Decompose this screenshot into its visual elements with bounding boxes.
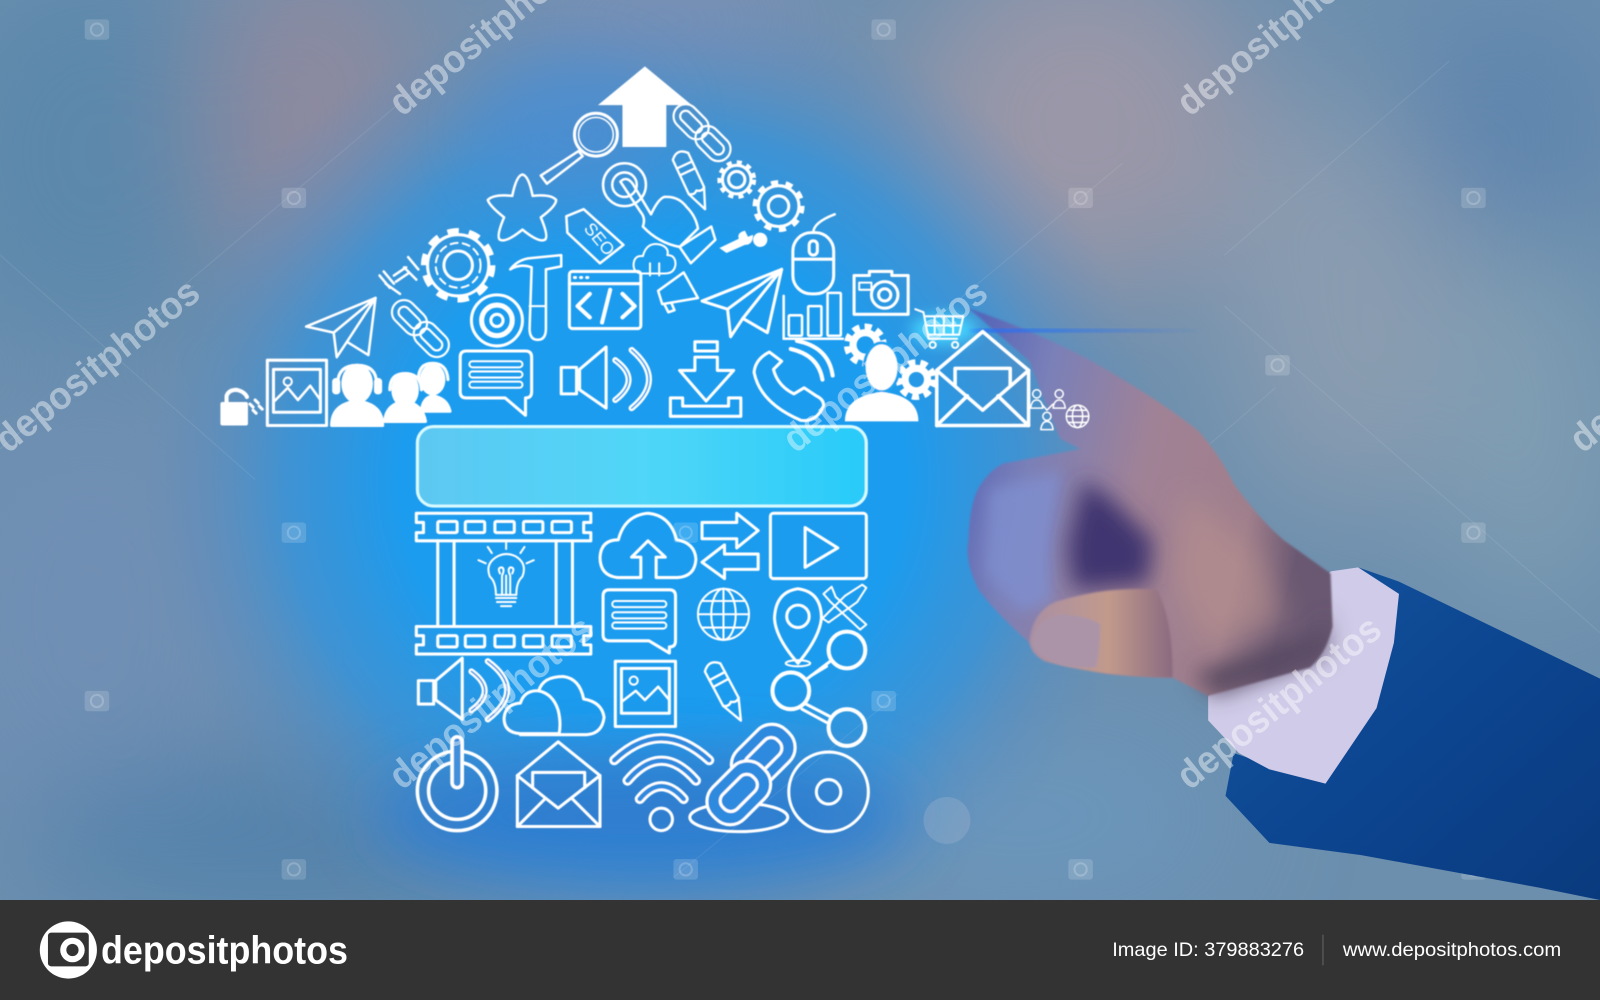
icon: bar chart xyxy=(784,293,843,339)
middle finger light xyxy=(985,471,1061,612)
icon: chat bubble lower xyxy=(603,590,676,653)
icon: power button xyxy=(417,737,497,831)
icon: magnifier xyxy=(541,113,617,184)
shirt cuff xyxy=(1208,567,1399,784)
icon: disc lower xyxy=(789,752,868,832)
icon: small gear xyxy=(719,162,754,197)
icon: touch hand xyxy=(603,163,715,263)
icon: pencil top xyxy=(671,149,713,213)
icon: map pin xyxy=(774,589,821,666)
light beam from fingertip xyxy=(911,315,1204,344)
footer bar xyxy=(0,900,1600,1000)
icon: picture lower xyxy=(615,661,676,727)
icon: twin clouds xyxy=(504,677,604,735)
icon: megaphone xyxy=(658,272,698,312)
wrist shadow under thumb xyxy=(1194,612,1327,696)
thumb xyxy=(1030,589,1173,678)
icon: paper plane right xyxy=(702,269,782,337)
icon: download tray xyxy=(670,342,741,416)
icon: support team xyxy=(385,363,450,421)
panel: blank title bar xyxy=(417,427,866,506)
icon: wrench and nut xyxy=(719,231,767,253)
icon: camera xyxy=(854,271,908,314)
separator xyxy=(1322,935,1323,965)
icon: film strip with light bulb xyxy=(416,513,591,654)
logo: camera badge xyxy=(40,921,97,979)
icon: wifi xyxy=(614,738,709,831)
icon: people network xyxy=(1031,390,1065,430)
icon: paper plane left xyxy=(306,298,376,357)
icon: unlocked padlock xyxy=(220,390,262,426)
icon: hammer xyxy=(510,255,561,340)
icon: wrench and screwdriver xyxy=(822,585,866,630)
icon: support person xyxy=(332,365,383,426)
jacket sleeve xyxy=(1226,567,1600,900)
watermark camera stamps xyxy=(85,19,1486,880)
watermark text: depositphotos xyxy=(381,607,602,798)
icon: star xyxy=(488,174,556,240)
icon: speaker xyxy=(561,347,649,408)
watermark text: depositphotos xyxy=(1168,607,1390,798)
icon: small globe xyxy=(1066,405,1089,428)
icon: open envelope xyxy=(937,332,1029,426)
watermark text xyxy=(0,0,1600,798)
icon: up arrow xyxy=(598,66,692,147)
house of icons xyxy=(220,66,1089,833)
hand and index finger xyxy=(967,308,1333,696)
icon: globe xyxy=(698,589,749,640)
icon: share nodes xyxy=(772,632,865,746)
hand pointing at the icons xyxy=(967,308,1600,900)
watermark text: depositphotos xyxy=(775,270,996,461)
icon: envelope lower xyxy=(517,742,600,827)
icon: gear xyxy=(755,183,802,230)
icon: shopping cart xyxy=(915,309,963,348)
icon: disc xyxy=(471,295,522,346)
website address: www.depositphotos.com xyxy=(1342,939,1561,961)
icon: light bulb xyxy=(479,543,534,606)
image id: Image ID: 379883276 xyxy=(1112,939,1304,961)
icon: person with gears xyxy=(845,327,934,421)
icon: mouse xyxy=(793,214,835,294)
icon: SEO tag: SEO xyxy=(580,219,619,259)
icon: chain left xyxy=(387,295,454,362)
icon: SEO tag xyxy=(566,209,623,263)
icon: chain top xyxy=(669,99,736,166)
icon: large gear xyxy=(424,232,492,299)
icon: pencil lower xyxy=(703,659,749,725)
icon: picture frame xyxy=(267,360,327,426)
icon: speaker lower xyxy=(418,658,507,719)
icon: cloud upload xyxy=(600,513,696,578)
logo wordmark: depositphotos xyxy=(101,929,348,972)
icon: satellite xyxy=(380,257,418,294)
icon: large chain link xyxy=(690,716,804,833)
icon: cloud with arrows xyxy=(634,244,676,276)
icon: video play xyxy=(770,513,866,579)
icon: phone xyxy=(754,341,833,421)
thumb nail xyxy=(1033,614,1100,668)
icon: code window xyxy=(569,271,641,329)
icon: exchange arrows xyxy=(702,513,758,579)
fold between fingers xyxy=(1067,480,1153,590)
icon: chat bubble xyxy=(460,351,532,415)
palm highlight xyxy=(1173,490,1286,643)
